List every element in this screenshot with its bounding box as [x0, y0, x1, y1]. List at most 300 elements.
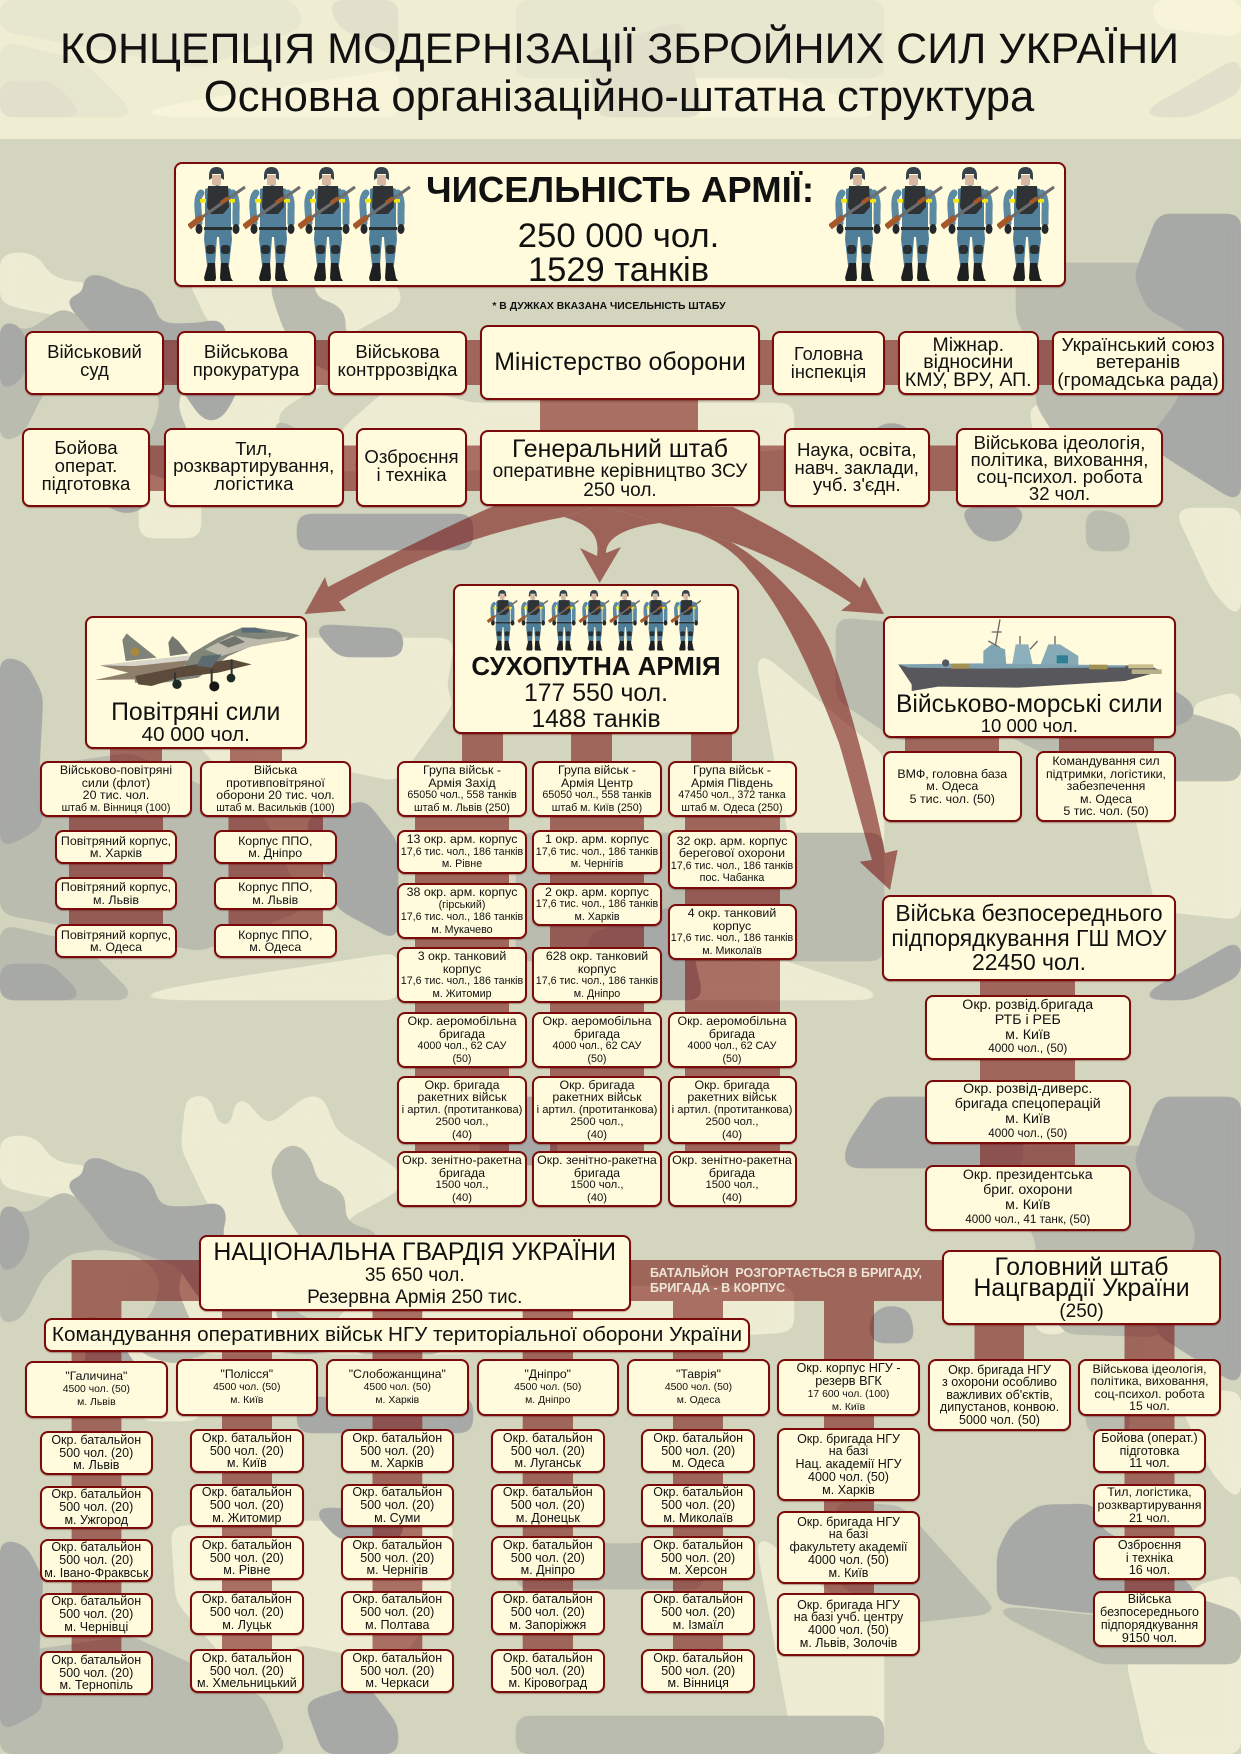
- battalion: Lviv: 500 чол. (20): [59, 1446, 133, 1460]
- box: presidential brigade: Окр. президентська: [963, 1167, 1093, 1183]
- box: navy main base: [883, 751, 1022, 822]
- box: air forces fleet: Військово-повітряні: [60, 763, 172, 777]
- box: air defence corps Dnipro: Корпус ППО,: [238, 834, 312, 848]
- battalion: Poltava: 500 чол. (20): [360, 1605, 434, 1619]
- box: AA brigade west: 1500 чол.,: [435, 1179, 489, 1191]
- box: missile brigade south: [668, 1076, 796, 1144]
- box: 1 corps: м. Чернігів: [571, 858, 623, 870]
- box: missile brigade west: [397, 1076, 527, 1144]
- arrow: to air force: [304, 505, 600, 614]
- box: 3 tank corps: [397, 947, 527, 1003]
- box: 628 tank corps: 17,6 тис. чол., 186 танків: [536, 975, 658, 987]
- box: ideology: 32 чол.: [1029, 482, 1090, 504]
- battalion: Kherson: м. Херсон: [669, 1563, 727, 1577]
- box: air defence corps Lviv: м. Львів: [252, 892, 298, 906]
- box: directly subordinate: [1093, 1591, 1206, 1647]
- box: presidential brigade: м. Київ: [1005, 1197, 1050, 1213]
- box: international relations: [898, 331, 1039, 395]
- box: air defence: противповітряної: [226, 776, 325, 790]
- box: 2 corps: м. Харків: [574, 911, 620, 923]
- box: presidential brigade: 4000 чол., 41 танк, (50): [965, 1213, 1090, 1226]
- box: special ops brigade: Окр. розвід-диверс.: [963, 1081, 1092, 1097]
- box: air defence corps Dnipro: [214, 830, 336, 864]
- panel: national guard: НАЦІОНАЛЬНА ГВАРДІЯ УКРАЇНИ: [213, 1238, 616, 1266]
- box: army group south: 47450 чол., 372 танка: [678, 789, 786, 801]
- battalion: Chernivtsi: м. Чернівці: [64, 1620, 128, 1634]
- box: 32 coastal corps: 32 окр. арм. корпус: [677, 834, 787, 848]
- land army name: СУХОПУТНА АРМІЯ: [471, 653, 721, 681]
- subtitle: Основна організаційно-штатна структура: [204, 73, 1034, 121]
- header band: [0, 0, 1241, 139]
- box: combat training: [22, 428, 150, 507]
- battalion: Mykolaiv: 500 чол. (20): [661, 1498, 735, 1512]
- battalion: Zaporizhzhia: Окр. батальйон: [503, 1592, 593, 1606]
- panel: navy: [883, 616, 1176, 738]
- box: air corps Lviv: [55, 877, 177, 910]
- air force personnel: 40 000 чол.: [142, 723, 250, 746]
- battalion: Zhytomyr: 500 чол. (20): [210, 1498, 284, 1512]
- box: logistics: [164, 428, 344, 507]
- battalion: Odesa: Окр. батальйон: [653, 1431, 743, 1445]
- footnote: * В ДУЖКАХ ВКАЗАНА ЧИСЕЛЬНІСТЬ ШТАБУ: [492, 301, 726, 312]
- battalion: Sumy: [340, 1484, 454, 1527]
- box: airmobile brigade centre: Окр. аеромобільна: [542, 1014, 652, 1028]
- box: 13 corps: 13 окр. арм. корпус: [407, 832, 517, 846]
- command: Tavria: м. Одеса: [677, 1395, 720, 1406]
- battalion: Vinnytsia: м. Вінниця: [668, 1676, 729, 1690]
- box: 13 corps: м. Рівне: [442, 858, 482, 870]
- box: military court: Військовий: [47, 341, 142, 362]
- box: army group west: Група військ -: [423, 763, 501, 777]
- box: presidential brigade: [925, 1165, 1130, 1231]
- box: 628 tank corps: корпус: [578, 962, 616, 976]
- box: 32 coastal corps: [668, 830, 796, 889]
- battalion: Ivano-Frankivsk: 500 чол. (20): [59, 1553, 133, 1567]
- command: reserve corps: Окр. корпус НГУ -: [796, 1360, 901, 1374]
- battalion: Kherson: [641, 1536, 755, 1580]
- box: missile brigade south: 2500 чол.,: [705, 1116, 759, 1128]
- box: support command: м. Одеса: [1080, 792, 1132, 806]
- box: logistics: Тил, логістика,: [1107, 1485, 1192, 1499]
- battalion: Lviv: м. Львів: [73, 1458, 119, 1472]
- box: airmobile brigade south: (50): [722, 1052, 742, 1064]
- battalion: Uzhhorod: 500 чол. (20): [59, 1500, 133, 1514]
- battalion: Dnipro: 500 чол. (20): [511, 1551, 585, 1565]
- box: navy main base: м. Одеса: [926, 779, 978, 793]
- battalion: Kharkiv: [340, 1429, 454, 1473]
- box: air defence corps Lviv: [214, 877, 336, 910]
- brigade: Kyiv faculty: м. Київ: [829, 1566, 868, 1580]
- brigade: Lviv training centre: на базі учб. центру: [794, 1610, 903, 1624]
- icon: warship: [898, 619, 1162, 691]
- box: army group west: [397, 761, 527, 817]
- box: 3 tank corps: корпус: [443, 962, 481, 976]
- box: AA brigade centre: бригада: [574, 1166, 620, 1180]
- battalion: Ternopil: [40, 1651, 153, 1695]
- box: science and education: навч. заклади,: [794, 457, 919, 478]
- box: general staff: 250 чол.: [583, 480, 657, 500]
- box: 1 corps: 17,6 тис. чол., 186 танків: [536, 846, 658, 858]
- brigade: Kyiv faculty: на базі: [829, 1527, 868, 1541]
- box: armament: 16 чол.: [1129, 1563, 1170, 1577]
- box: missile brigade centre: і артил. (протитанкова): [537, 1104, 657, 1116]
- box: guard ideology: [1078, 1359, 1221, 1416]
- box: main inspection: [772, 331, 885, 395]
- box: general staff: [480, 430, 760, 506]
- battalion: Chernihiv: 500 чол. (20): [360, 1551, 434, 1565]
- box: recon brigade: м. Київ: [1005, 1026, 1050, 1042]
- band caption: battalion deployment: БРИГАДА - В КОРПУС: [650, 1281, 785, 1295]
- box: science and education: Наука, освіта,: [797, 439, 917, 460]
- battalion: Poltava: м. Полтава: [365, 1618, 429, 1632]
- box: directly subordinate: 9150 чол.: [1122, 1631, 1177, 1645]
- box: air defence corps Odesa: Корпус ППО,: [238, 928, 312, 942]
- box: army group centre: 65050 чол., 558 танків: [542, 789, 652, 801]
- battalion: Luhansk: [491, 1429, 605, 1473]
- box: guard ideology: Військова ідеологія,: [1092, 1362, 1207, 1376]
- box: missile brigade west: (40): [452, 1128, 472, 1140]
- battalion: Cherkasy: [340, 1649, 454, 1693]
- box: missile brigade west: Окр. бригада: [424, 1078, 500, 1092]
- box: air corps Lviv: Повітряний корпус,: [61, 880, 171, 894]
- battalion: Uzhhorod: Окр. батальйон: [51, 1487, 141, 1501]
- battalion: Mykolaiv: [641, 1484, 755, 1527]
- air force name: Повітряні сили: [111, 699, 280, 726]
- box: support command: [1036, 751, 1176, 822]
- box: guard brigade: дипустанов, конвою.: [940, 1400, 1059, 1414]
- box: missile brigade south: Окр. бригада: [694, 1078, 770, 1092]
- box: air defence corps Odesa: м. Одеса: [249, 940, 301, 954]
- battalion: Donetsk: Окр. батальйон: [503, 1485, 593, 1499]
- command: Halychyna: "Галичина": [65, 1369, 127, 1383]
- land army personnel: 177 550 чол.: [524, 680, 668, 707]
- brigade: Kharkiv academy: Окр. бригада НГУ: [797, 1432, 900, 1446]
- box: veterans union: (громадська рада): [1057, 370, 1219, 391]
- battalion: Rivne: [190, 1536, 304, 1580]
- box: 38 corps: 38 окр. арм. корпус: [407, 885, 517, 899]
- box: 2 corps: 17,6 тис. чол., 186 танків: [536, 898, 658, 910]
- box: 628 tank corps: [532, 947, 662, 1003]
- box: directly subordinate: безпосереднього: [1100, 1605, 1199, 1619]
- box: army group west: 65050 чол., 558 танків: [407, 789, 517, 801]
- battalion: Cherkasy: м. Черкаси: [365, 1676, 429, 1690]
- box: 2 corps: [532, 883, 662, 926]
- brigade: Lviv training centre: Окр. бригада НГУ: [797, 1598, 900, 1612]
- box: combat training: Бойова (операт.): [1101, 1431, 1198, 1445]
- battalion: Rivne: Окр. батальйон: [202, 1538, 292, 1552]
- box: airmobile brigade south: [668, 1012, 796, 1068]
- box: guard brigade: [928, 1359, 1071, 1430]
- battalion: Lviv: Окр. батальйон: [51, 1433, 141, 1447]
- box: recon brigade: РТБ і РЕБ: [995, 1012, 1061, 1028]
- battalion: Kharkiv: 500 чол. (20): [360, 1444, 434, 1458]
- land army tanks: 1488 танків: [531, 706, 661, 733]
- brigade: Kharkiv academy: м. Харків: [822, 1483, 875, 1497]
- box: air defence corps Dnipro: м. Дніпро: [248, 846, 302, 860]
- box: AA brigade south: (40): [722, 1192, 742, 1204]
- box: AA brigade south: [668, 1151, 796, 1207]
- battalion: Zaporizhzhia: [491, 1591, 605, 1635]
- box: air forces fleet: 20 тис. чол.: [83, 788, 149, 802]
- box: directly subordinate: підпорядкування: [1101, 1618, 1198, 1632]
- box: armament: [1093, 1536, 1206, 1580]
- box: 3 tank corps: 3 окр. танковий: [418, 949, 506, 963]
- battalion: Vinnytsia: Окр. батальйон: [653, 1651, 743, 1665]
- box: main inspection: інспекція: [791, 362, 866, 382]
- box: logistics: [1093, 1484, 1206, 1527]
- soldiers right group: [829, 167, 1055, 281]
- battalion: Kharkiv: м. Харків: [371, 1456, 424, 1470]
- battalion: Kyiv: Окр. батальйон: [202, 1431, 292, 1445]
- battalion: Odesa: 500 чол. (20): [661, 1444, 735, 1458]
- box: recon brigade: [925, 995, 1130, 1060]
- box: military court: [25, 331, 164, 395]
- box: missile brigade centre: (40): [587, 1128, 607, 1140]
- box: logistics: 21 чол.: [1129, 1511, 1170, 1525]
- box: international relations: Міжнар.: [932, 334, 1004, 356]
- box: missile brigade centre: Окр. бригада: [559, 1078, 634, 1092]
- box: combat training: [1093, 1429, 1206, 1473]
- panel: direct subordination troops: Війська безпосереднього: [895, 900, 1163, 926]
- box: presidential brigade: бриг. охорони: [983, 1182, 1072, 1198]
- battalion: Izmail: 500 чол. (20): [661, 1605, 735, 1619]
- box: 628 tank corps: м. Дніпро: [574, 988, 620, 1000]
- battalion: Odesa: [641, 1429, 755, 1473]
- box: special ops brigade: [925, 1080, 1130, 1144]
- box: prosecutor: [176, 331, 316, 395]
- box: 38 corps: м. Мукачево: [431, 924, 493, 936]
- box: 38 corps: (гірський): [439, 898, 485, 910]
- battalion: Lviv: [40, 1431, 153, 1475]
- box: 38 corps: 17,6 тис. чол., 186 танків: [401, 911, 523, 923]
- battalion: Cherkasy: Окр. батальйон: [352, 1651, 442, 1665]
- box: counterintelligence: Військова: [355, 341, 440, 362]
- battalion: Lutsk: [190, 1591, 304, 1635]
- box: veterans union: [1052, 331, 1224, 395]
- box: 4 tank corps: 4 окр. танковий: [688, 906, 776, 920]
- box: air defence: [200, 761, 351, 817]
- box: AA brigade centre: 1500 чол.,: [570, 1179, 624, 1191]
- brigade: Lviv training centre: 4000 чол. (50): [808, 1623, 889, 1637]
- box: AA brigade south: Окр. зенітно-ракетна: [672, 1153, 792, 1167]
- battalion: Kirovohrad: м. Кіровоград: [508, 1676, 587, 1690]
- box: AA brigade west: бригада: [439, 1166, 485, 1180]
- box: support command: 5 тис. чол. (50): [1063, 804, 1149, 818]
- battalion: Khmelnytskyi: 500 чол. (20): [210, 1664, 284, 1678]
- box: ideology: Військова ідеологія,: [974, 432, 1145, 452]
- box: armament: і техніка: [1126, 1551, 1173, 1565]
- battalion: Ternopil: 500 чол. (20): [59, 1666, 133, 1680]
- box: main inspection: Головна: [794, 344, 863, 364]
- battalion: Ternopil: м. Тернопіль: [59, 1678, 133, 1692]
- brigade: Lviv training centre: м. Львів, Золочів: [800, 1636, 897, 1650]
- box: recon brigade: 4000 чол., (50): [988, 1042, 1067, 1055]
- battalion: Kirovohrad: Окр. батальйон: [503, 1651, 593, 1665]
- battalion: Uzhhorod: [40, 1486, 153, 1529]
- box: army group west: Армія Захід: [428, 776, 496, 790]
- command: Polissia: [176, 1359, 318, 1416]
- battalion: Cherkasy: 500 чол. (20): [360, 1664, 434, 1678]
- box: AA brigade west: [397, 1151, 527, 1207]
- box: air defence: оборони 20 тис. чол.: [216, 788, 335, 802]
- box: ministry of defence: [480, 325, 760, 400]
- battalion: Zaporizhzhia: 500 чол. (20): [511, 1605, 585, 1619]
- panel: operational command: Командування оперативних військ НГУ територіальної оборони України: [52, 1323, 742, 1346]
- battalion: Rivne: 500 чол. (20): [210, 1551, 284, 1565]
- title: КОНЦЕПЦІЯ МОДЕРНІЗАЦІЇ ЗБРОЙНИХ СИЛ УКРАЇНИ: [60, 25, 1179, 73]
- battalion: Khmelnytskyi: [190, 1649, 304, 1693]
- box: combat training: операт.: [55, 455, 117, 476]
- command: Polissia: м. Київ: [230, 1395, 263, 1406]
- box: international relations: КМУ, ВРУ, АП.: [905, 369, 1032, 391]
- panel: national guard HQ: [942, 1250, 1221, 1325]
- battalion: Dnipro: Окр. батальйон: [503, 1538, 593, 1552]
- battalion: Khmelnytskyi: м. Хмельницький: [197, 1676, 297, 1690]
- box: prosecutor: прокуратура: [193, 359, 299, 380]
- box: AA brigade centre: Окр. зенітно-ракетна: [537, 1153, 657, 1167]
- battalion: Donetsk: м. Донецьк: [516, 1511, 580, 1525]
- battalion: Mykolaiv: Окр. батальйон: [653, 1485, 743, 1499]
- command: Tavria: [627, 1359, 770, 1416]
- box: AA brigade centre: [532, 1151, 662, 1207]
- box: 4 tank corps: 17,6 тис. чол., 186 танків: [671, 932, 793, 944]
- box: counterintelligence: контррозвідка: [338, 359, 457, 380]
- battalion: Chernihiv: Окр. батальйон: [352, 1538, 442, 1552]
- battalion: Lutsk: м. Луцьк: [222, 1618, 271, 1632]
- box: combat training: 11 чол.: [1129, 1456, 1170, 1470]
- box: directly subordinate: Війська: [1128, 1592, 1171, 1606]
- box: missile brigade west: ракетних військ: [417, 1090, 507, 1104]
- box: army group centre: штаб м. Київ (250): [552, 802, 642, 814]
- brigade: Kyiv faculty: Окр. бригада НГУ: [797, 1514, 900, 1528]
- panel: national guard HQ: Нацгвардії України: [973, 1275, 1190, 1302]
- battalion: Lutsk: Окр. батальйон: [202, 1592, 292, 1606]
- navy name: Військово-морські сили: [896, 691, 1163, 718]
- box: logistics: розквартирування,: [173, 455, 334, 476]
- box: air corps Kharkiv: Повітряний корпус,: [61, 834, 171, 848]
- box: ministry of defence: Міністерство оборони: [494, 348, 746, 376]
- battalion: Chernihiv: м. Чернігів: [367, 1563, 428, 1577]
- soldiers row: [487, 590, 702, 650]
- box: logistics: Тил,: [235, 438, 272, 459]
- box: AA brigade south: 1500 чол.,: [705, 1179, 759, 1191]
- box: guard brigade: важливих об'єктів,: [946, 1388, 1053, 1402]
- box: AA brigade centre: (40): [587, 1192, 607, 1204]
- box: airmobile brigade west: Окр. аеромобільна: [407, 1014, 517, 1028]
- brigade: Kyiv faculty: факультету академії: [789, 1540, 908, 1554]
- box: missile brigade centre: 2500 чол.,: [570, 1116, 624, 1128]
- battalion: Sumy: Окр. батальйон: [352, 1485, 442, 1499]
- box: missile brigade west: 2500 чол.,: [435, 1116, 489, 1128]
- battalion: Chernihiv: [340, 1536, 454, 1580]
- brigade: Kharkiv academy: Нац. академії НГУ: [795, 1457, 902, 1471]
- box: army group centre: [532, 761, 662, 817]
- battalion: Luhansk: м. Луганськ: [515, 1456, 581, 1470]
- box: air corps Odesa: Повітряний корпус,: [61, 928, 171, 942]
- command: Halychyna: 4500 чол. (50): [63, 1384, 130, 1395]
- box: missile brigade south: і артил. (протитанкова): [672, 1104, 792, 1116]
- box: air forces fleet: сили (флот): [82, 776, 150, 790]
- box: combat training: Бойова: [54, 437, 118, 458]
- box: support command: Командування сил: [1052, 754, 1160, 768]
- battalion: Chernivtsi: Окр. батальйон: [51, 1594, 141, 1608]
- soldiers left group: [188, 167, 411, 281]
- box: 32 coastal corps: берегової охорони: [679, 846, 785, 860]
- brigade: Kyiv faculty: [777, 1511, 920, 1584]
- box: 1 corps: [532, 830, 662, 874]
- battalion: Donetsk: 500 чол. (20): [511, 1498, 585, 1512]
- arrow: to land army: [564, 505, 660, 583]
- arrow: to direct-subordination troops: [660, 523, 898, 890]
- battalion: Zhytomyr: Окр. батальйон: [202, 1485, 292, 1499]
- box: AA brigade west: (40): [452, 1192, 472, 1204]
- battalion: Ternopil: Окр. батальйон: [51, 1653, 141, 1667]
- box: airmobile brigade west: [397, 1012, 527, 1068]
- box: 4 tank corps: корпус: [713, 918, 751, 932]
- battalion: Vinnytsia: 500 чол. (20): [661, 1664, 735, 1678]
- battalion: Kirovohrad: 500 чол. (20): [511, 1664, 585, 1678]
- command: Slobozhanshchyna: "Слобожанщина": [349, 1367, 446, 1381]
- box: 1 corps: 1 окр. арм. корпус: [545, 832, 649, 846]
- panel: national guard: Резервна Армія 250 тис.: [307, 1287, 522, 1308]
- battalion: Kherson: Окр. батальйон: [653, 1538, 743, 1552]
- brigade: Kharkiv academy: на базі: [829, 1444, 868, 1458]
- battalion: Izmail: Окр. батальйон: [653, 1592, 743, 1606]
- box: science and education: [784, 428, 930, 507]
- box: airmobile brigade centre: 4000 чол., 62 САУ: [553, 1040, 641, 1052]
- arrow: to navy: [600, 505, 884, 614]
- battalion: Sumy: 500 чол. (20): [360, 1498, 434, 1512]
- strength heading: ЧИСЕЛЬНІСТЬ АРМІЇ:: [426, 169, 814, 210]
- box: 32 coastal corps: пос. Чабанка: [700, 872, 764, 884]
- brigade: Kharkiv academy: 4000 чол. (50): [808, 1470, 889, 1484]
- box: combat training: підготовка: [1120, 1444, 1179, 1458]
- panel: direct subordination troops: підпорядкування ГШ МОУ: [891, 924, 1167, 950]
- box: navy main base: 5 тис. чол. (50): [910, 792, 995, 806]
- panel: national guard: [198, 1235, 631, 1311]
- battalion: Izmail: м. Ізмаїл: [673, 1618, 724, 1632]
- battalion: Vinnytsia: [641, 1649, 755, 1693]
- box: air corps Kharkiv: [55, 830, 177, 864]
- box: general staff: Генеральний штаб: [512, 434, 728, 462]
- box: support command: підтримки, логістики,: [1046, 767, 1166, 781]
- battalion: Donetsk: [491, 1484, 605, 1527]
- command: reserve corps: [777, 1359, 920, 1416]
- battalion: Kirovohrad: [491, 1649, 605, 1693]
- box: 3 tank corps: м. Житомир: [432, 988, 492, 1000]
- box: logistics: розквартирування: [1098, 1498, 1201, 1512]
- box: 38 corps: [397, 883, 527, 939]
- box: airmobile brigade west: бригада: [439, 1026, 485, 1040]
- command: Slobozhanshchyna: 4500 чол. (50): [364, 1382, 431, 1393]
- box: AA brigade south: бригада: [709, 1166, 755, 1180]
- battalion: Chernivtsi: 500 чол. (20): [59, 1607, 133, 1621]
- box: ideology: соц-психол. робота: [977, 466, 1142, 486]
- battalion: Kherson: 500 чол. (20): [661, 1551, 735, 1565]
- battalion: Poltava: [340, 1591, 454, 1635]
- box: veterans union: Український союз: [1061, 335, 1214, 356]
- box: missile brigade south: (40): [722, 1128, 742, 1140]
- box: air corps Odesa: м. Одеса: [90, 940, 142, 954]
- box: air defence corps Odesa: [214, 924, 336, 958]
- box: air forces fleet: [40, 761, 192, 817]
- panel: land army: [453, 584, 739, 734]
- box: 13 corps: [397, 830, 527, 874]
- battalion: Ivano-Frankivsk: Окр. батальйон: [51, 1540, 141, 1554]
- box: recon brigade: Окр. розвід.бригада: [962, 997, 1093, 1013]
- command: Dnipro: [476, 1359, 619, 1416]
- box: airmobile brigade west: (50): [452, 1052, 472, 1064]
